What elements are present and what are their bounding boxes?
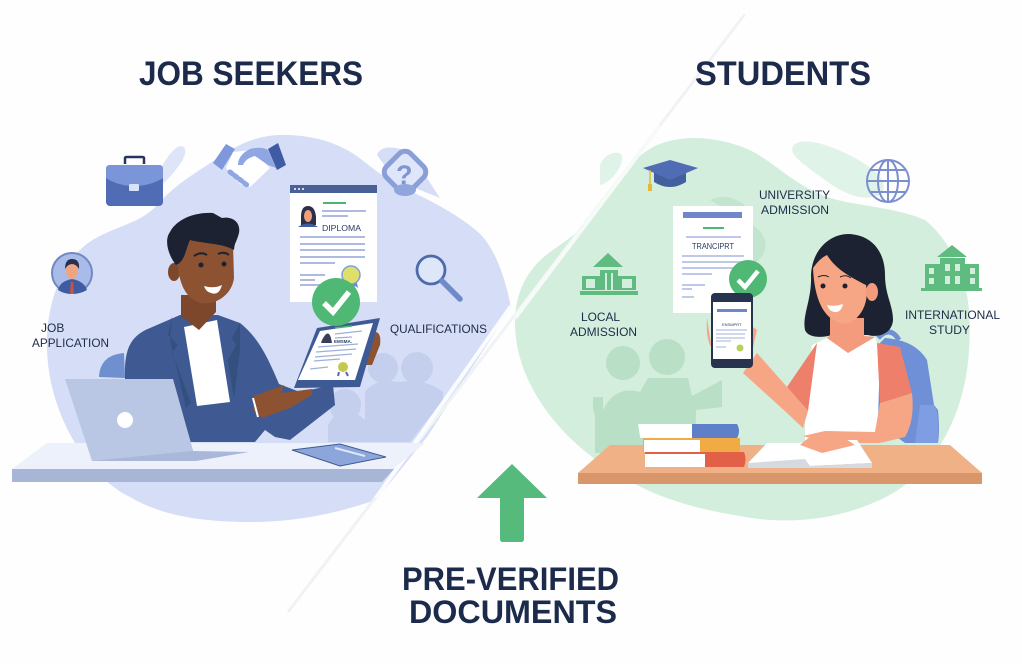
- label: university admission: UNIVERSITY: [759, 188, 830, 202]
- girl: [707, 234, 939, 443]
- left sleeve: [787, 343, 817, 411]
- jacket: [125, 315, 335, 442]
- label: local admission: ADMISSION: [570, 325, 637, 339]
- icon: diploma check badge: [312, 278, 360, 326]
- right arm: [803, 393, 913, 443]
- face: [813, 255, 867, 324]
- hand on book: [800, 432, 855, 453]
- hair: [804, 234, 893, 337]
- label: international study: STUDY: [929, 323, 970, 337]
- hand with phone: [707, 318, 757, 352]
- stacked books: [638, 424, 746, 467]
- label: international study: INTERNATIONAL: [905, 308, 1000, 322]
- label: job application: [32, 321, 109, 350]
- icon: handshake: [213, 143, 286, 187]
- footer title: DOCUMENTS: [409, 594, 617, 630]
- student desk: [578, 445, 982, 484]
- tablet: [294, 318, 380, 388]
- chair: [99, 353, 125, 378]
- shirt: [184, 320, 230, 406]
- background silhouettes: [593, 339, 722, 453]
- background silhouettes: [328, 352, 443, 442]
- hair: [167, 213, 239, 265]
- desk: [12, 443, 425, 482]
- phone: [711, 293, 753, 368]
- icon: question badge: [381, 148, 429, 196]
- man: [99, 213, 380, 442]
- neck: [181, 295, 216, 330]
- laptop: [65, 379, 249, 461]
- footer title: PRE-VERIFIED: [402, 561, 619, 597]
- raised arm: [743, 353, 808, 428]
- panel: students blob: [515, 138, 970, 520]
- tablet on desk: [292, 444, 386, 466]
- diploma document: DIPLOMA: [322, 223, 361, 233]
- backpack strap top: [878, 332, 899, 340]
- backpack: [863, 338, 939, 443]
- transcript document: TRANCIPRT: [692, 242, 734, 251]
- hand and forearm: [253, 385, 312, 418]
- footer title: [402, 561, 619, 630]
- right sleeve: [877, 343, 912, 403]
- tablet: EMSMA.: [334, 339, 352, 344]
- open book: [748, 440, 872, 468]
- diagonal divider: [288, 14, 745, 612]
- icon: globe: [867, 160, 909, 202]
- eyes and mouth: [820, 284, 826, 288]
- arrow: [477, 464, 547, 542]
- icon: question badge: ?: [396, 160, 412, 190]
- label: job application: APPLICATION: [32, 336, 109, 350]
- eyes and mouth: [198, 262, 204, 268]
- top: [805, 337, 882, 443]
- seal: [342, 266, 360, 292]
- title: students: STUDENTS: [695, 55, 871, 93]
- icon: graduation cap: [643, 160, 698, 191]
- label: university admission: [759, 188, 830, 217]
- icon: international building: [921, 245, 982, 291]
- label: university admission: ADMISSION: [761, 203, 829, 217]
- label: job application: JOB: [41, 321, 64, 335]
- title: job seekers: JOB SEEKERS: [139, 55, 363, 93]
- panel: job seekers blob: [47, 135, 511, 522]
- neck: [827, 318, 875, 353]
- icon: job applicant avatar: [52, 253, 92, 294]
- ear: [866, 283, 878, 301]
- face: [177, 235, 234, 303]
- icon: briefcase: [106, 157, 163, 206]
- label: local admission: LOCAL: [581, 310, 620, 324]
- label: local admission: [570, 310, 637, 339]
- diploma document: [290, 185, 377, 302]
- person portrait: [298, 206, 318, 227]
- transcript document: [673, 206, 753, 313]
- icon: transcript check badge: [729, 260, 767, 298]
- icon: magnifying glass: [417, 256, 460, 299]
- phone: ENSMPRT: [722, 322, 742, 327]
- label: qualifications: QUALIFICATIONS: [390, 322, 487, 336]
- label: international study: [905, 308, 1000, 337]
- icon: local admission building: [580, 253, 638, 295]
- ear: [168, 263, 180, 281]
